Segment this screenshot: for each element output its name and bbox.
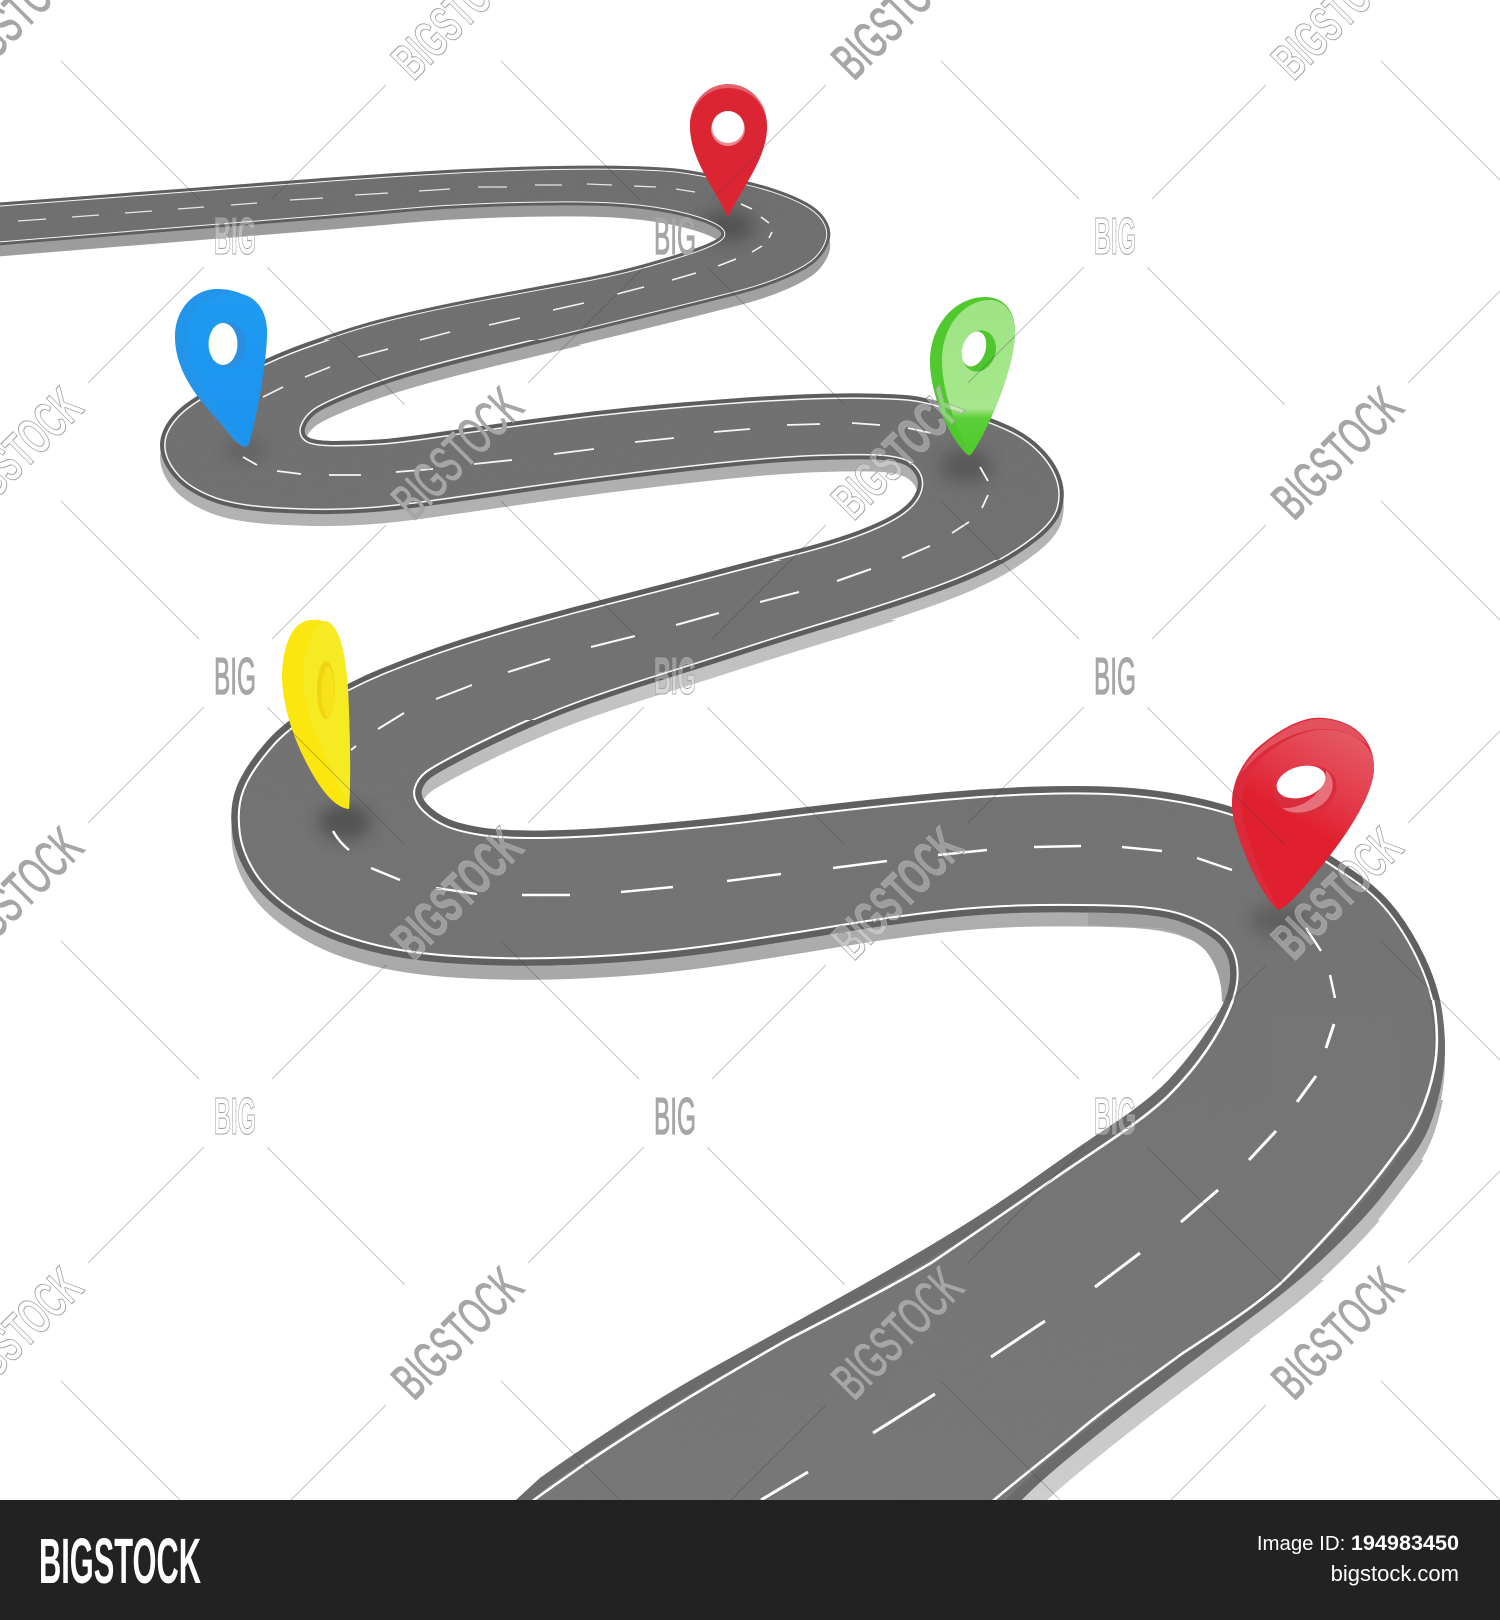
pin: blue — [175, 289, 267, 447]
text: BIG — [1094, 648, 1136, 706]
pin: yellow — [282, 620, 350, 809]
watermark: BIG marks: BIG — [214, 1088, 256, 1146]
footer bar — [0, 1500, 1500, 1620]
road centre dashes — [18, 184, 1335, 1500]
watermark: BIGSTOCK marks: BIGSTOCK — [821, 817, 974, 970]
watermark: BIG marks: BIG — [654, 648, 696, 706]
pin: red near — [1232, 718, 1374, 910]
text: BIG — [1094, 1088, 1136, 1146]
watermark: BIGSTOCK marks: BIGSTOCK — [1261, 377, 1414, 530]
watermark: BIGSTOCK marks: BIGSTOCK — [1261, 1257, 1414, 1410]
site url: bigstock.com — [1331, 1561, 1459, 1586]
watermark: BIGSTOCK marks: BIGSTOCK — [1261, 817, 1414, 970]
pin: green — [930, 297, 1015, 455]
watermark: BIG marks: BIG — [214, 208, 256, 266]
watermark: BIGSTOCK marks: BIGSTOCK — [381, 817, 534, 970]
watermark: BIGSTOCK marks: BIGSTOCK — [381, 1257, 534, 1410]
watermark: BIG marks: BIG — [214, 648, 256, 706]
watermark: BIGSTOCK marks: BIGSTOCK — [821, 377, 974, 530]
watermark: BIGSTOCK marks: BIGSTOCK — [821, 1257, 974, 1410]
footer bar: BIGSTOCK — [39, 1525, 201, 1597]
image id: Image ID: 194983450 — [1257, 1530, 1459, 1555]
watermark: BIG marks — [214, 208, 1136, 1146]
watermark: BIGSTOCK marks: BIGSTOCK — [381, 377, 534, 530]
watermark: BIG marks: BIG — [654, 208, 696, 266]
pin: red far — [690, 84, 767, 217]
text: BIG — [1094, 208, 1136, 266]
watermark: BIG marks: BIG — [654, 1088, 696, 1146]
